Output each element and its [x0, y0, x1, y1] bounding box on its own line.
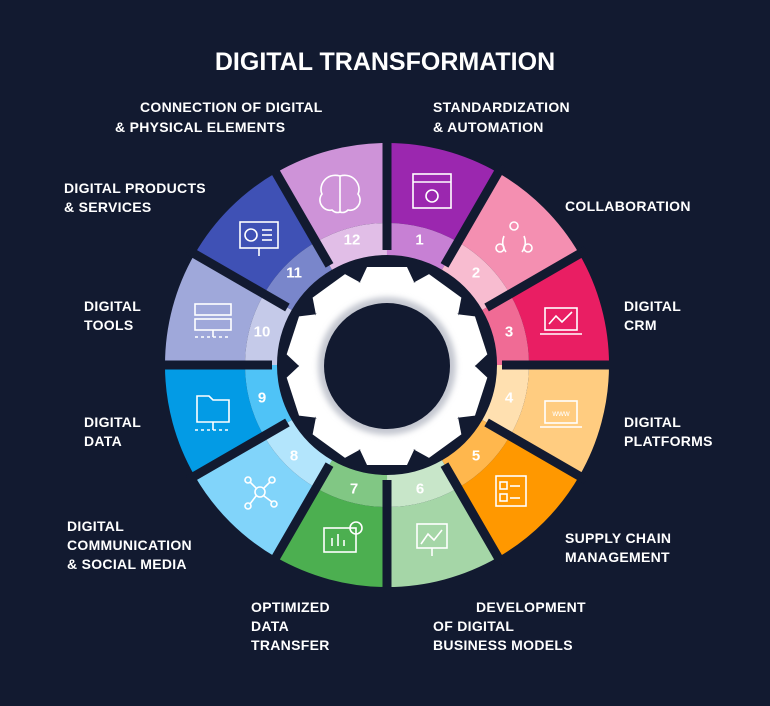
icon: laptop www: [540, 401, 582, 427]
labels: COMMUNICATION: [67, 537, 192, 553]
icon: board management: [496, 476, 526, 506]
labels: CONNECTION OF DIGITAL: [140, 99, 323, 115]
labels: TOOLS: [84, 317, 133, 333]
ring: 12 segments: [139, 117, 635, 613]
labels: STANDARDIZATION: [433, 99, 570, 115]
segment numbers: 10: [254, 324, 270, 340]
labels: COLLABORATION: [565, 198, 691, 214]
icon: data transfer monitor: [324, 522, 362, 552]
segment numbers: 8: [290, 448, 298, 464]
title: DIGITAL TRANSFORMATION: [215, 48, 555, 76]
segment numbers: 7: [350, 480, 358, 498]
central gear: [285, 267, 489, 465]
labels: PLATFORMS: [624, 433, 713, 449]
labels: DIGITAL: [624, 298, 681, 314]
icon: folder: [195, 396, 231, 430]
labels: DIGITAL PRODUCTS: [64, 180, 206, 196]
icon: brain: [320, 175, 360, 212]
segment numbers: [254, 232, 514, 498]
labels: OPTIMIZED: [251, 599, 330, 615]
labels: DIGITAL: [67, 518, 124, 534]
labels: SUPPLY CHAIN: [565, 530, 671, 546]
labels: & SERVICES: [64, 199, 152, 215]
segment numbers: 1: [415, 232, 424, 248]
labels: & SOCIAL MEDIA: [67, 556, 187, 572]
icon: server: [195, 304, 231, 337]
labels: & AUTOMATION: [433, 119, 544, 135]
labels: DIGITAL: [84, 414, 141, 430]
labels: TRANSFER: [251, 637, 330, 653]
labels: [64, 99, 713, 653]
icon: collaboration people: [496, 222, 532, 252]
icon: network: [245, 477, 277, 509]
segment numbers: 6: [416, 480, 424, 498]
segment numbers: 9: [258, 390, 266, 406]
segment numbers: 12: [344, 232, 360, 248]
icon: window gear: [413, 174, 451, 208]
icon: laptop chart: [540, 308, 582, 334]
segment numbers: 4: [505, 390, 514, 406]
labels: DEVELOPMENT: [476, 599, 586, 615]
labels: OF DIGITAL: [433, 618, 514, 634]
labels: DIGITAL: [84, 298, 141, 314]
icon: presentation model: [417, 524, 447, 556]
labels: CRM: [624, 317, 657, 333]
segment numbers: 5: [472, 448, 480, 464]
labels: DATA: [84, 433, 122, 449]
icon: presentation board: [240, 222, 278, 256]
labels: DATA: [251, 618, 289, 634]
labels: DIGITAL: [624, 414, 681, 430]
segment numbers: 2: [472, 264, 480, 282]
labels: BUSINESS MODELS: [433, 637, 573, 653]
labels: MANAGEMENT: [565, 549, 670, 565]
segment numbers: 3: [505, 324, 513, 340]
icon: laptop www: www: [551, 409, 570, 418]
labels: & PHYSICAL ELEMENTS: [115, 119, 285, 135]
segment numbers: 11: [286, 264, 302, 282]
